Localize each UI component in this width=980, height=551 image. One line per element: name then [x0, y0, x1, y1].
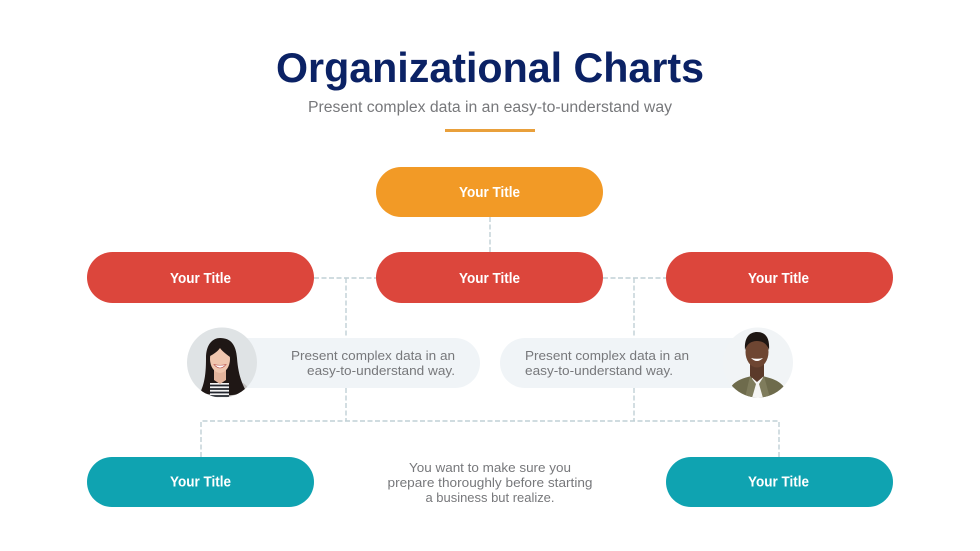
icon: man portrait	[732, 328, 793, 398]
box: right red title	[666, 252, 893, 303]
callout: left description	[205, 338, 480, 388]
infographic canvas	[87, 52, 893, 507]
title: Organizational Charts	[276, 44, 704, 91]
subtitle: Present complex data in an easy-to-understand way	[308, 99, 672, 116]
box: bottom-right teal title	[666, 457, 893, 507]
callout: right description: Present complex data in an	[525, 348, 689, 363]
text block: bottom centre note	[388, 460, 592, 505]
box: bottom-right teal title: Your Title	[748, 474, 809, 490]
box: centre red title	[376, 252, 603, 303]
box: bottom-left teal title	[87, 457, 314, 507]
icon: woman portrait	[187, 327, 257, 398]
box: bottom-left teal title: Your Title	[170, 474, 231, 490]
box: right red title: Your Title	[748, 270, 809, 287]
box: left red title: Your Title	[170, 270, 231, 287]
box: left red title	[87, 252, 314, 303]
box: top orange title	[376, 167, 603, 217]
callout: left description: Present complex data in an	[291, 348, 455, 363]
text block: bottom centre note: You want to make sure you	[409, 460, 571, 475]
callout: right description	[500, 338, 775, 388]
text block: bottom centre note: prepare thoroughly before starting	[388, 475, 592, 490]
text block: bottom centre note: a business but realize.	[426, 490, 554, 505]
title accent line	[445, 129, 535, 132]
box: centre red title: Your Title	[459, 270, 520, 287]
callout: left description: easy-to-understand way.	[307, 363, 455, 378]
box: top orange title: Your Title	[459, 184, 520, 201]
callout: right description: easy-to-understand way.	[525, 363, 673, 378]
dashed connectors	[201, 217, 779, 457]
